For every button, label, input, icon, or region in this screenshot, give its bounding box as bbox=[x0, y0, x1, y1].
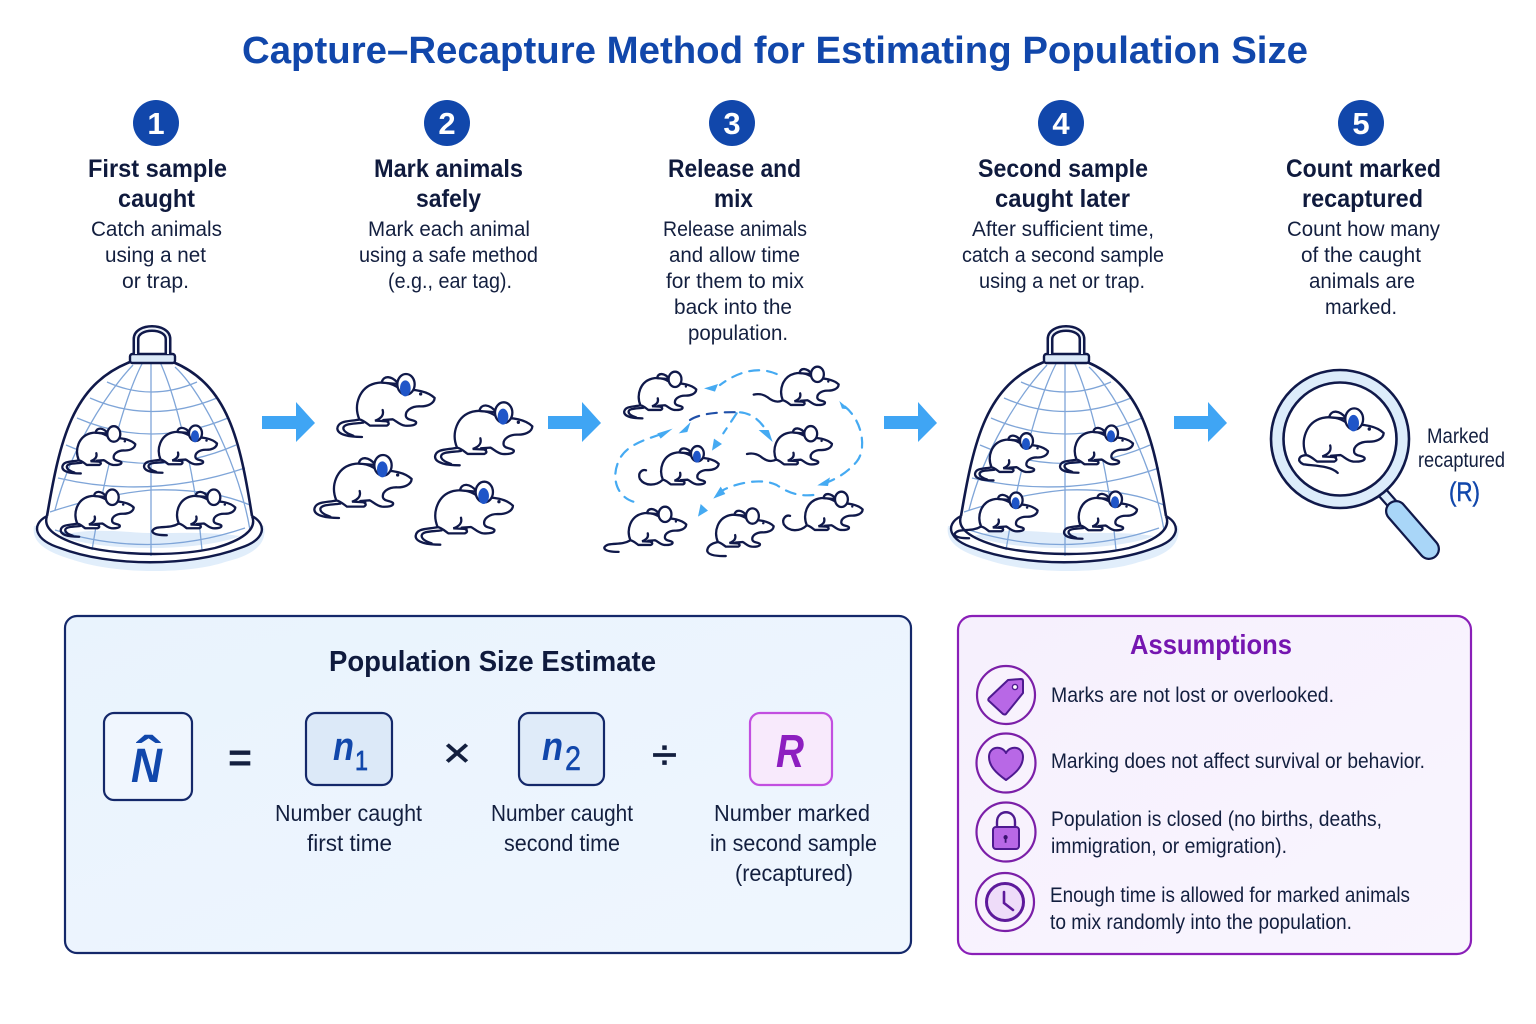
step 1 number badge: 1 bbox=[147, 106, 165, 141]
step 5 description: marked. bbox=[1325, 295, 1397, 319]
assumption 3 text bbox=[1051, 807, 1382, 858]
formula panel heading: Population Size Estimate bbox=[329, 646, 656, 678]
term: n1: 1 bbox=[355, 745, 368, 776]
step 2 description: using a safe method bbox=[359, 243, 538, 267]
term: n2 bbox=[519, 713, 604, 785]
arrow 3 to 4 bbox=[884, 402, 937, 442]
step 1 description: Catch animals bbox=[91, 217, 222, 241]
step 5 description: animals are bbox=[1309, 269, 1415, 293]
step 5 description: of the caught bbox=[1301, 243, 1421, 267]
step 5: count marked bbox=[1271, 100, 1505, 549]
n2 caption: second time bbox=[504, 830, 620, 856]
step 2 number badge: 2 bbox=[438, 106, 456, 141]
step 3 description: population. bbox=[688, 321, 788, 345]
step 3 description: back into the bbox=[674, 295, 792, 319]
step 3 heading bbox=[668, 155, 801, 213]
assumption 1 text: Marks are not lost or overlooked. bbox=[1051, 683, 1334, 707]
step 4 description: After sufficient time, bbox=[972, 217, 1154, 241]
icon: lock bbox=[976, 802, 1036, 862]
step 3 description bbox=[663, 217, 807, 345]
icon: heart bbox=[976, 734, 1036, 792]
R caption: (recaptured) bbox=[735, 860, 853, 886]
step 3: release and mix bbox=[604, 100, 863, 556]
n1 caption: Number caught bbox=[275, 800, 423, 826]
term: R bbox=[750, 713, 832, 785]
label: marked recaptured (R) bbox=[1418, 425, 1505, 507]
assumption 4 text bbox=[1050, 883, 1410, 934]
icon: cage with four mice bbox=[34, 328, 265, 571]
multiply sign: × bbox=[443, 729, 471, 776]
label: marked recaptured (R): Marked bbox=[1427, 425, 1489, 448]
step 3 description: Release animals bbox=[663, 217, 807, 241]
title: Capture–Recapture Method for Estimating Population Size bbox=[242, 30, 1308, 72]
n2 caption bbox=[491, 800, 634, 856]
step 4 description bbox=[962, 217, 1164, 293]
step 2 description: (e.g., ear tag). bbox=[388, 269, 512, 293]
step 3 description: and allow time bbox=[669, 243, 800, 267]
icon: clock bbox=[976, 873, 1034, 931]
step 5 number badge bbox=[1338, 100, 1384, 146]
assumption 4 text: to mix randomly into the population. bbox=[1050, 910, 1352, 934]
step 4 heading bbox=[978, 155, 1148, 213]
step 2: mark animals bbox=[314, 100, 538, 545]
step 2 heading bbox=[374, 155, 523, 213]
R caption: Number marked bbox=[714, 800, 870, 826]
assumptions heading: Assumptions bbox=[1130, 629, 1292, 660]
step 4 heading: Second sample bbox=[978, 155, 1148, 183]
step 5 heading: Count marked bbox=[1286, 155, 1441, 183]
n1 caption: first time bbox=[307, 830, 392, 856]
panel: assumptions bbox=[958, 616, 1471, 954]
step 1 description: or trap. bbox=[122, 269, 189, 293]
n2 caption: Number caught bbox=[491, 800, 634, 826]
term: N hat: ˆ bbox=[136, 729, 162, 782]
icon: magnifying glass with marked mouse bbox=[1271, 370, 1429, 549]
step 4 description: using a net or trap. bbox=[979, 269, 1145, 293]
step 3 number badge bbox=[709, 100, 755, 146]
step 2 description bbox=[359, 217, 538, 293]
assumption 2 text: Marking does not affect survival or behavior. bbox=[1051, 749, 1425, 773]
assumption 3 text: Population is closed (no births, deaths, bbox=[1051, 807, 1382, 831]
term: N hat: N bbox=[131, 740, 163, 793]
step 2 number badge bbox=[424, 100, 470, 146]
arrow 1 to 2 bbox=[262, 402, 315, 442]
assumption 4 text: Enough time is allowed for marked animals bbox=[1050, 883, 1410, 907]
icon: cage with four marked mice bbox=[948, 328, 1179, 571]
step 1: first sample bbox=[34, 100, 265, 571]
step 3 heading: mix bbox=[714, 185, 753, 213]
label: marked recaptured (R): recaptured bbox=[1418, 449, 1505, 472]
panel: population size estimate bbox=[65, 616, 911, 953]
step 1 heading: First sample bbox=[88, 155, 227, 183]
step 1 description bbox=[91, 217, 222, 293]
step 5 number badge: 5 bbox=[1352, 106, 1370, 141]
divide sign: ÷ bbox=[652, 731, 677, 778]
step 5 description: Count how many bbox=[1287, 217, 1440, 241]
step 3 heading: Release and bbox=[668, 155, 801, 183]
step 1 heading bbox=[88, 155, 227, 213]
step 4 description: catch a second sample bbox=[962, 243, 1164, 267]
step 4: second sample bbox=[948, 100, 1179, 571]
step 1 description: using a net bbox=[105, 243, 206, 267]
step 1 heading: caught bbox=[118, 185, 196, 213]
step 2 description: Mark each animal bbox=[368, 217, 530, 241]
term: n2: 2 bbox=[565, 740, 581, 778]
step 3 description: for them to mix bbox=[666, 269, 804, 293]
step 2 heading: safely bbox=[416, 185, 481, 213]
n1 caption bbox=[275, 800, 423, 856]
arrow 4 to 5 bbox=[1174, 402, 1227, 442]
term: R: R bbox=[776, 725, 804, 777]
step 4 number badge bbox=[1038, 100, 1084, 146]
icon: four marked mice bbox=[314, 374, 532, 545]
R caption: in second sample bbox=[710, 830, 877, 856]
step 5 description bbox=[1287, 217, 1440, 319]
assumption 3 text: immigration, or emigration). bbox=[1051, 834, 1287, 858]
arrow 2 to 3 bbox=[548, 402, 601, 442]
term: n1 bbox=[306, 713, 392, 785]
equals sign: = bbox=[228, 736, 252, 780]
step 5 heading: recaptured bbox=[1302, 185, 1423, 213]
label: marked recaptured (R): (R) bbox=[1449, 477, 1480, 507]
term: n2: n bbox=[542, 725, 563, 769]
icon: mice mixing with dashed paths bbox=[604, 367, 863, 556]
step 4 heading: caught later bbox=[995, 185, 1130, 213]
term: N hat bbox=[104, 713, 192, 800]
R caption bbox=[710, 800, 877, 886]
step 1 number badge bbox=[133, 100, 179, 146]
step 5 heading bbox=[1286, 155, 1441, 213]
step 3 number badge: 3 bbox=[723, 106, 741, 141]
step 2 heading: Mark animals bbox=[374, 155, 523, 183]
term: n1: n bbox=[333, 725, 354, 769]
icon: tag bbox=[977, 666, 1035, 724]
step 4 number badge: 4 bbox=[1052, 106, 1070, 141]
